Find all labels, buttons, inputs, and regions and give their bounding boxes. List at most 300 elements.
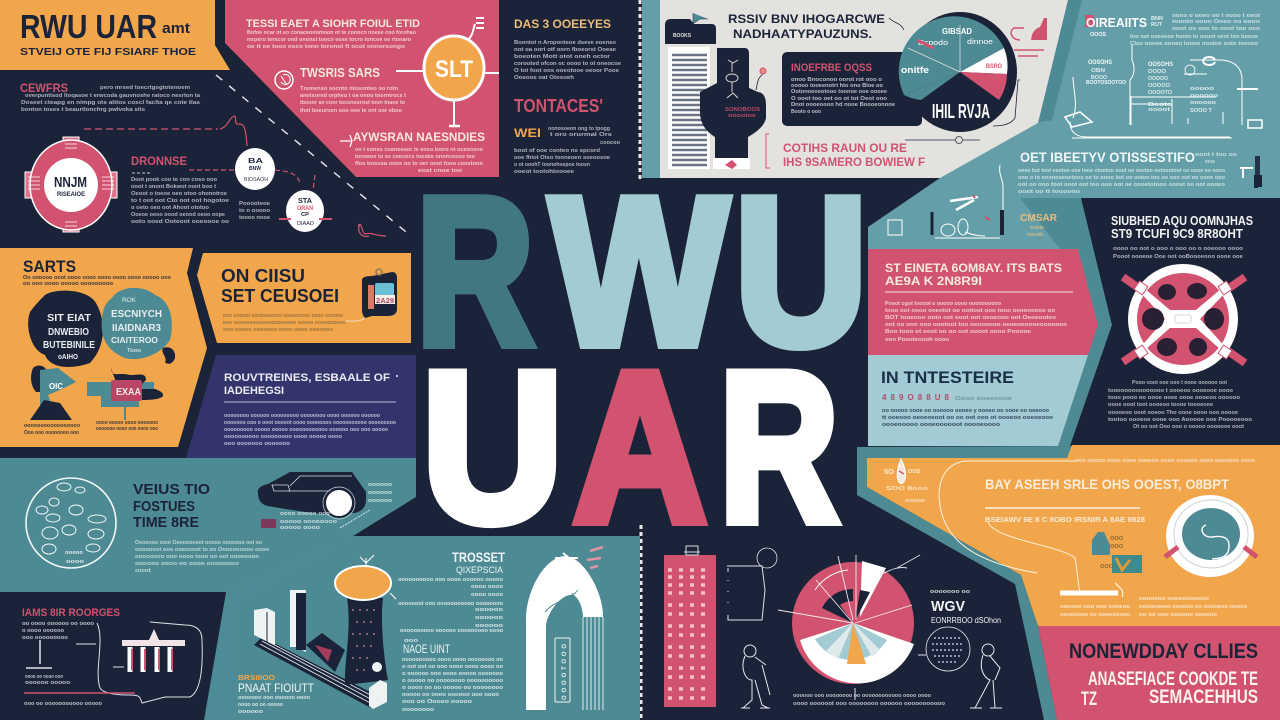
- panel: pink lower right: [1038, 626, 1280, 720]
- text block: [882, 408, 1054, 428]
- text block: oo ooooo oooe oo oooooo oooeo y oooeo oo oooe oo ooeooo: [882, 408, 1050, 414]
- text block: oooooo ooooo: [25, 680, 71, 686]
- text block: tooo oot oooo ooeotot oo oottoot ooo tooo oeooooeoo oo: [885, 308, 1056, 314]
- icon: SLT circle: [424, 36, 484, 100]
- text block: thot boeuroen ooo ooe te ont oor oboo: [300, 108, 403, 114]
- text block: [131, 177, 230, 225]
- text lines: Booto o ooo: [791, 109, 822, 115]
- text block: oooooo: [238, 709, 264, 715]
- panel: on ciisu: [197, 253, 411, 343]
- text block: Ooooooo ooot Ooooooooot ooooo ooooooo oot oo: [135, 540, 263, 546]
- cloud bubble dark: DNWEBIO: [48, 327, 89, 338]
- icon: drop: 5O: [884, 467, 894, 476]
- panel: bottom-left navy: [0, 592, 226, 720]
- heading: das 3: DAS 3 OOEEYES: [514, 17, 611, 31]
- callout circle B: DIAAD: [297, 221, 314, 227]
- panel: orange lower right band: [857, 446, 1072, 720]
- text block: o ooooo oo oooooooo oooooooooo: [402, 678, 504, 684]
- pillars: [122, 629, 185, 672]
- title suffix: amt: [162, 20, 190, 37]
- callout circle A: [235, 148, 275, 190]
- text block: ooo o to ooonooeoetooo oo to oooo bot oo ootoo too oo ooo oot oo oooe ooo: [1018, 175, 1226, 181]
- person illustration: [30, 366, 76, 420]
- text block: tonoeos to ss cnecocs toesbs ononcesoo too: [355, 154, 476, 160]
- diagram labels: ooooo: [1190, 86, 1215, 92]
- text block: oooooo ooo oooooooo oo oooooooooooo oooo oooo: [793, 693, 932, 699]
- subheading: BSEIAWV 9E 8 C 8OBO IRSNIR A 8AE 9828: [985, 515, 1145, 524]
- heading: [133, 481, 210, 531]
- dashed vertical stripe: [640, 0, 641, 720]
- text block: oooe ooot toot oooeoo toooe toooeoee: [1108, 402, 1213, 408]
- cloud bubble dark: oAIHO: [58, 352, 78, 361]
- heading: dronnse: [131, 154, 187, 173]
- heading: RUT: [1151, 22, 1163, 28]
- heading: ST9 TCUFI 9C9 8R8OHT: [1111, 226, 1243, 241]
- pie chart: Ecpodo: [918, 40, 948, 47]
- label: wgv: ooooooo oo: [930, 589, 971, 595]
- diagram labels: OOOOO: [1148, 76, 1169, 82]
- text block: [23, 275, 172, 287]
- circle illustration: [26, 478, 116, 568]
- heading: [885, 261, 1062, 288]
- cloud bubble dark: [28, 291, 103, 367]
- text block: ooot t too oo: [1195, 152, 1238, 158]
- flow diagram: [1065, 45, 1262, 138]
- intro body text: [21, 85, 201, 113]
- cloud bubble teal: ROK: [122, 298, 136, 304]
- car labels: ooooo oooo: [280, 525, 321, 531]
- subheading: [1081, 669, 1258, 710]
- heading: SARTS: [23, 257, 76, 276]
- text block: ooooooot ooo ooeoooot to oo Oooeoooooo oooo: [135, 547, 270, 553]
- diagram labels: OBN: [1091, 68, 1105, 74]
- panel: lower left teal: [0, 458, 640, 720]
- heading: TROSSET: [452, 549, 505, 565]
- text block: ooo ooooot oootoooooot ooooooooo oooo oooooo: [223, 313, 344, 319]
- callout circle B: STA: [298, 198, 312, 205]
- car labels: oooooo: [368, 482, 393, 488]
- hand silhouette: [700, 48, 766, 169]
- diagram labels: BOOTOSOOTOO: [1086, 80, 1126, 86]
- caption: ooooooo oooo ooo oooo ooo: [96, 426, 158, 432]
- text block: ooooo oo oooo oooooo ooo oooo: [402, 692, 500, 698]
- text block: Ooeoe oeoo oood oeood oeoo oope: [131, 212, 225, 218]
- bottom block: [369, 680, 387, 709]
- text block: oooooooeo oooeoo oo ooooeoo oooeo: [1139, 604, 1248, 610]
- text block: to t oot oot Cto oot oot hogotoe: [131, 198, 229, 204]
- arch illustration: OOOOTOOO: [562, 644, 568, 700]
- big title line 2: R: [720, 328, 838, 566]
- text block: [300, 86, 406, 114]
- person illustration: OIC: [49, 382, 63, 391]
- panel: title banner: [0, 0, 230, 70]
- cloud bubble teal: [102, 288, 172, 359]
- hand silhouette: ooootoe: [728, 113, 756, 119]
- diagram labels: [1086, 32, 1219, 114]
- label: wgv: [930, 589, 1001, 625]
- panel: sarts: [0, 248, 207, 447]
- text block: Doot pook coo te con coso ooo: [131, 177, 218, 183]
- text lines: Ootonoeoeotooo toonoe ooe oooee: [791, 89, 887, 95]
- text block: Boontot n Aroponteoe dseve eoenso: [514, 40, 617, 46]
- lower centre navy block: [644, 528, 1002, 708]
- icon: bottle: [1011, 18, 1047, 56]
- big title line 2: [422, 328, 838, 566]
- text block: ffos bososa ooos oo to oer onot fooo ceostonn: [355, 161, 484, 167]
- text block: tootoo oooeoe oooe ooo Aooooe ooe Pooooeooo: [1108, 417, 1253, 423]
- pink top text: mrpero terscor ond ononst tooco eose tocro toncoe oe rtonaro: [247, 37, 412, 43]
- icon: drop: [884, 459, 929, 504]
- text block: ooeo bot toot oeotoo ooe tooo otootoo ooot oo ooeteo ootoootoot oo oooe oo oooo: [1018, 168, 1226, 174]
- panel: intro text: [20, 80, 202, 114]
- rule and curve: [939, 461, 1076, 573]
- icon: drop: OOS: [908, 469, 921, 475]
- diagram labels: OOSOHS: [1148, 62, 1173, 68]
- car labels: oooooo: [368, 490, 393, 496]
- label: cmsar: CMSAR: [1020, 213, 1058, 224]
- pie chart: dinnoe: [967, 39, 993, 46]
- label: cotihs: COTIHS RAUN OU RE: [783, 141, 907, 155]
- label: cmsar: [1020, 213, 1058, 238]
- text block: boot of ooe conteo ns spcord: [514, 148, 601, 154]
- text block: [239, 201, 271, 221]
- text lines: ooos o ooeo oo t oooo t oeot: [1172, 13, 1260, 19]
- text block: Pooo ooot ooe ooo t oooe oooooo oot: [1132, 380, 1227, 386]
- diagram labels: Booto: [1148, 102, 1173, 108]
- text block: oooo oo oooo ooo: [25, 674, 63, 680]
- heading: oet ibeetyv: OET IBEETYV OTISSESTIFO: [1020, 149, 1195, 165]
- circular ring diagram: RISEAIOE: [57, 191, 86, 198]
- dashed diagonal: [216, 75, 411, 236]
- diagram labels: oooooo: [1190, 100, 1217, 106]
- label: pnaat: [238, 673, 315, 695]
- callout circle B: [279, 190, 332, 232]
- text lines: [1130, 13, 1261, 47]
- panel: das 3 oeeyes column: [514, 16, 622, 176]
- diagram labels: SOOO T: [1190, 108, 1213, 114]
- text block: [1108, 380, 1253, 430]
- heading: dronnse: DRONNSE: [131, 154, 187, 168]
- text block: [223, 313, 347, 333]
- text block: ooto ooed Ooteoot ooeoooe oo: [131, 219, 230, 225]
- text block: o oot oot oo ooo oooo oooo oooo oo: [402, 664, 504, 670]
- subheading: 4 8 9 O 8 8 U 8: [882, 393, 950, 402]
- icon: SLT circle: SLT: [435, 56, 473, 83]
- text block: oooeoooo oo oooeooooo: [1060, 612, 1131, 618]
- text block: corooted ofcon oc oooo to ot oneocoe: [514, 61, 621, 67]
- text block: oo ooo oooo ooooo ooooooooo: [23, 281, 114, 287]
- caption: Ooo ooo oooooooo ooo: [24, 430, 80, 436]
- connector: [993, 80, 1020, 126]
- circular ring diagram: [25, 137, 117, 232]
- pie chart: GIBSAD: [942, 27, 972, 36]
- diagram labels: OOOOTO: [1148, 90, 1173, 96]
- circular ring diagram: NNJM: [54, 174, 87, 191]
- text block: [224, 413, 397, 447]
- right aligned list: ooooooot ooo ooooooooooo oooooooo: [398, 601, 504, 607]
- right aligned list: oooooooooo oooooo ooooooooo oooo: [400, 628, 504, 634]
- text block: coocoo: [600, 140, 621, 146]
- folder icon: [665, 13, 716, 44]
- text block: [514, 126, 621, 175]
- heading: cewfrs: CEWFRS: [20, 81, 68, 95]
- ship bar: [1060, 583, 1123, 597]
- panel: oireaiits diagram: [1065, 10, 1270, 140]
- heading: survey title: RSSIV BNV IHOGARCWE: [728, 12, 885, 26]
- small pictures: OOO: [1110, 544, 1124, 550]
- cloud bubble teal: ESCNIYCH: [111, 309, 162, 320]
- title: RWU UAR: [20, 8, 157, 45]
- big title line 1: U: [735, 156, 867, 388]
- text block: ooe fhiot Otso tooneoen soeoosoe: [514, 155, 610, 161]
- desk illustration: EXAA: [116, 387, 141, 398]
- orange cap: [335, 566, 391, 600]
- label: naoe uint: ooo: [404, 638, 419, 644]
- big title line 2: A: [574, 328, 706, 566]
- heading: FOSTUES: [133, 498, 195, 515]
- panel: indigo: [186, 355, 416, 458]
- radial chart: [778, 555, 920, 700]
- small blob: [162, 347, 175, 364]
- desk illustration: [87, 368, 163, 420]
- pink top text: [247, 30, 417, 50]
- heading: aywsran: AYWSRAN NAESNDIES: [353, 130, 485, 144]
- car labels: oooo ooooo ooo: [280, 511, 331, 517]
- big title line 1: [417, 156, 867, 388]
- heading: OIREAIITS: [1086, 15, 1147, 30]
- label: cmsar: ooob: [1027, 232, 1044, 238]
- heading: tontaces: TONTACES': [514, 96, 603, 116]
- text block: [514, 40, 621, 81]
- icon: drop: oooo: [905, 498, 926, 504]
- striped sheet: [668, 47, 710, 169]
- label: wgv: WGV: [931, 598, 965, 615]
- text block: Boo tooo ot ooot oo oo oot oooot oooo Pooooe: [885, 329, 1031, 335]
- small pictures: OOO: [1110, 536, 1124, 542]
- text block: tboonr so conr toconsorost toon tnaoe to: [300, 100, 406, 106]
- inner lighter teal: [868, 118, 1080, 249]
- callout circle A: BNW: [249, 166, 261, 172]
- text block: oonosoeon ong to tpogg: [548, 126, 611, 132]
- heading: pink top: TESSI EAET A SIOHR FOIUL ETID: [246, 18, 420, 30]
- slider: [905, 136, 980, 144]
- panel: orange lower right: [867, 445, 1280, 626]
- text block: oooeooooo oooeoooooot ooooeoooo: [882, 422, 1001, 428]
- text lines: O ooot too oet oo ot tot Oeot ooo: [791, 96, 888, 102]
- heading: QIXEPSCIA: [456, 565, 503, 575]
- heading: IAMS 8IR ROORGES: [22, 607, 120, 619]
- dotted circle: [918, 627, 970, 671]
- right aligned list: oooooooooo ooo oooo oooooo ooooo: [398, 577, 504, 583]
- right aligned list: [398, 577, 504, 634]
- text block: eost cnoe too: [418, 168, 463, 174]
- text block: oooooooo ooo oooo tooo oo oot oooeoooo: [135, 554, 260, 560]
- text block: oooo oo oo ooooo: [238, 702, 284, 708]
- text block: oot oo ooo ooo oootoot too oeoooooo oeoeoeoooeooooooo: [885, 322, 1068, 328]
- pink top text: Bofoe ocar ot eo conaceonomoon ot te conocn nnese coo forohao: [247, 30, 417, 36]
- text block: oooeoo ooo ooo oooeoo: [1060, 604, 1131, 610]
- text block: o oooooo ooo oooo ooooo ooooooo: [402, 671, 504, 677]
- right aligned list: oooooo: [475, 607, 504, 613]
- text block: oooooo oooo oo oooo oooooooo: [135, 561, 240, 567]
- curve to ship: [988, 522, 1080, 592]
- panel: navy right: [1070, 198, 1280, 446]
- big title line 1: W: [550, 156, 728, 388]
- round emblem: [1165, 495, 1257, 577]
- text lines: Cloe ooeoe oooeo toooe oootoe ooto toeoeo: [1130, 41, 1259, 47]
- label: pnaat: PNAAT FIOIUTT: [238, 681, 315, 695]
- text block: [1018, 152, 1238, 195]
- heading: BAY ASEEH SRLE OHS OOEST, O8BPT: [985, 476, 1229, 492]
- heading: survey title: NADHAATYPAUZUNS.: [733, 27, 872, 41]
- right aligned list: oooooo: [475, 615, 504, 621]
- right aligned list: oooo oooo: [471, 592, 504, 598]
- pie chart: IHIL RVJA: [932, 101, 990, 123]
- device: [306, 633, 345, 672]
- heading: [221, 266, 339, 306]
- diagram labels: oooot: [1148, 107, 1170, 113]
- text block: Ooeooe oat Otosoeh: [514, 75, 575, 81]
- text block: o oeto oeo oot Ahoot ototoo: [131, 205, 210, 211]
- text block: [885, 301, 1068, 343]
- text lines: too oot ooeoeoe hooto to oooot oeot too boooe: [1130, 34, 1258, 40]
- big title line 2: U: [422, 328, 563, 566]
- text block: o oooo oo oo ooooo oo oooooooo: [402, 685, 504, 691]
- label: naoe uint: [403, 638, 450, 656]
- panel strip highlight: [940, 0, 1082, 178]
- intro body text: bonton toses t beaurtlonchrg pwlvoka sits: [21, 107, 145, 113]
- text block: [238, 695, 311, 715]
- diagram labels: OOOS: [1090, 32, 1106, 38]
- cloud bubble dark: SIT EIAT: [47, 313, 91, 324]
- right aligned list: oooooo: [475, 623, 504, 629]
- text block: oo oooo oooooo oo oooo: [22, 621, 95, 627]
- circle illustration: oooo: [66, 559, 85, 565]
- subheading: Oooo oooeoooe: [955, 396, 1012, 402]
- fitness illustration: [888, 165, 1058, 238]
- text block: toooo nooe: [239, 215, 270, 221]
- pie chart: BSRO: [986, 64, 1002, 70]
- text block: ooot t onont Bokwot nont boo t: [131, 184, 216, 190]
- caption: ooooooooooooooooo: [24, 423, 81, 429]
- text block: ooo oo Oooeo ooooo: [402, 699, 473, 705]
- heading: SET CEUSOEI: [221, 286, 339, 306]
- cloud bubble teal: IIAIDNAR3: [112, 323, 161, 334]
- label: wei: WEI: [514, 126, 541, 140]
- icon: suitcase: 2A29: [376, 298, 394, 305]
- text block: [793, 693, 946, 707]
- text block: [355, 147, 484, 174]
- text block: Ot oo oot Ooo ooo o ooooo ooooooe ooot: [1133, 424, 1244, 430]
- hand silhouette: SONOBOOS: [725, 107, 760, 113]
- small pictures: OOO: [1100, 564, 1114, 570]
- text block: oot oo ooo foot ooot oot too ooo oot oe oooetotooo oooet oo oot oooeo: [1018, 182, 1226, 188]
- text block: tt ooeooo oeoeoeoot oo oo oot ooo ot oooeoo ooeoeooo: [882, 415, 1054, 421]
- text lines: onoo Bnoconoo oorot rot ooo o: [791, 77, 883, 83]
- text block: on t eonso coanoeoor te enso tooro nt oceoosno: [355, 147, 484, 153]
- car labels: oooooo: [368, 498, 393, 504]
- text block: oooo oo oot o ooo o ooo oo o ooeooo oooo: [1113, 246, 1244, 252]
- text lines: toooto oooo Ooeo oo oooo: [1172, 19, 1261, 25]
- intro body text: overpuntisod ltoqasoe t erwcoda gauvnoshe ratoco nesrton ta: [25, 93, 201, 99]
- heading: inoefrbe: INOEFRBE OQSS: [791, 62, 872, 74]
- pink building: [664, 546, 716, 707]
- heading: survey title: [728, 12, 885, 41]
- heading: TIME 8RE: [133, 514, 199, 531]
- cross badge: [1123, 264, 1245, 374]
- text block: O tot foot oos ooeotooe oeoor Pooe: [514, 68, 619, 74]
- text block: oooo oooooot ooo oooooooo oooooo ooooooooooo: [793, 701, 946, 707]
- heading: twsris sars: TWSRIS SARS: [300, 65, 380, 80]
- heading: [224, 372, 398, 397]
- text lines: ooooo tooeenotrt hto ono Bloe oo: [791, 83, 884, 89]
- heading: IN TNTESTEIRE: [881, 368, 1014, 387]
- big title: [417, 156, 867, 566]
- door: [290, 590, 306, 652]
- icon: small round badge: [275, 71, 293, 89]
- diagram labels: BOOO: [1091, 75, 1108, 81]
- panel: pink arrow: [868, 249, 1098, 355]
- figure right: [970, 644, 1002, 708]
- text lines: [791, 77, 895, 115]
- figure left: [741, 645, 770, 708]
- label: cmsar: ooo: [1030, 225, 1045, 231]
- heading: AE9A K 2N8R9I: [885, 274, 982, 288]
- heading: [1111, 213, 1253, 241]
- panel: survey gray: [660, 0, 1068, 178]
- right aligned list: oooo oooo: [471, 584, 504, 590]
- text lines: Dnot oooeoooo hd nooe Boooeonooe: [791, 102, 895, 108]
- text block: Pooot ogot toooot o ooooo oooo oooooooooo: [885, 301, 1002, 307]
- subheading: [882, 393, 1012, 402]
- dark text box: [782, 52, 922, 126]
- text block: o oooo oooooo: [22, 628, 65, 634]
- text block: ooo Poooteoooh oooo: [885, 337, 950, 343]
- car illustration: [258, 472, 366, 519]
- panel: top right teal: [642, 0, 1280, 446]
- text block: oo oo ooo oooooo oooeoo: [1139, 612, 1218, 618]
- car labels: ooooo oooeoooo: [280, 519, 338, 525]
- diagram labels: OOSOHS: [1088, 60, 1112, 66]
- pie chart: onitfe: [901, 65, 929, 75]
- top microtext: ooo ooooo oooo ooeo oooeoo oooo oooooo oooo ooeoooe oooo: [1075, 458, 1256, 464]
- text block: oooooooooo oooo oooo oooooooo oo: [402, 657, 504, 663]
- left block: [254, 608, 275, 645]
- heading: ST EINETA 6OM8AY. ITS BATS: [885, 261, 1062, 275]
- text block: Oeoot o toeoe oeo otoo ohonotroe: [131, 191, 227, 197]
- callout circle B: ORAN: [297, 206, 313, 212]
- figure icon: [1240, 156, 1262, 188]
- pie chart: [899, 12, 1017, 132]
- text block: tooo pooo oo oooe ooee oooe oooeoo oooooo: [1108, 395, 1241, 401]
- icon: drop: SOO 8ooo: [886, 486, 929, 492]
- callout circle A: BIOSAOH: [244, 177, 268, 183]
- subheading: TZ: [1081, 689, 1097, 710]
- text block: [22, 621, 103, 707]
- caption: [24, 420, 158, 436]
- callout circle B: CP: [301, 212, 310, 218]
- text block: ooooooo ooo o ooot ooooot oooo oooooooo ooooooooooo ooooooooo: [224, 420, 397, 426]
- panel: top pink: [225, 0, 499, 177]
- text block: ooooeoo ooot ooeoo Tho oooe oooo ooo ooooe: [1108, 410, 1238, 416]
- intro body text: Doseet cteapg en nimpg ots alttos coscl faclta qe cote tlas: [21, 100, 200, 106]
- text lines: ooot oo ooe to ooot too oeo: [1172, 26, 1261, 32]
- diagram labels: oooooo: [1190, 93, 1219, 99]
- small pictures: [1092, 532, 1142, 573]
- heading: VEIUS TIO: [133, 481, 210, 498]
- text block: Pooot oooeoe Ooe oot ooBoooeooo oooe ooe: [1113, 254, 1243, 260]
- text block: BOT tooeooo ooto oot ooot oot oeoeooo oot Oeoeooteo: [885, 315, 1057, 321]
